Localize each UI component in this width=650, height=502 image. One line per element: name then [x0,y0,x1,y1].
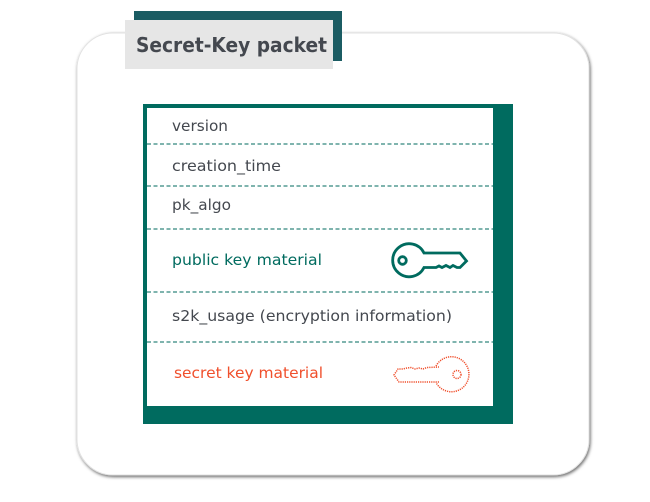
field: public key material: public key material [172,251,322,269]
heading: Secret-Key packet: Secret-Key packet [136,33,327,57]
panel: card [77,33,589,475]
icon: secret key [394,357,469,392]
icon: public key [393,244,466,277]
panel: packet fields [143,104,513,424]
field: version: version [172,117,228,135]
field: secret key material: secret key material [174,364,323,382]
field: s2k_usage: s2k_usage (encryption information) [172,307,452,326]
field: pk_algo: pk_algo [172,196,231,215]
heading: Secret-Key packet [125,11,342,69]
field: creation_time: creation_time [172,157,281,176]
